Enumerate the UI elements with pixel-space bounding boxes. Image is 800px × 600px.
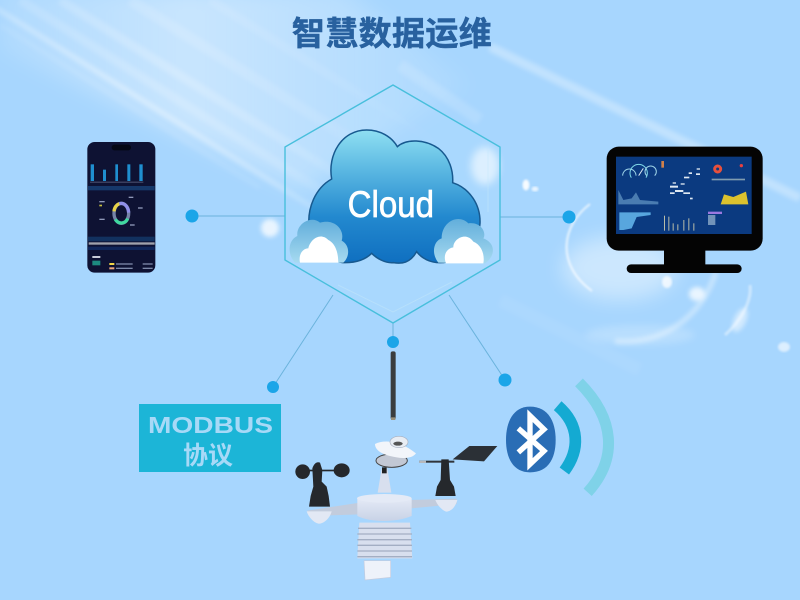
inner signal arc xyxy=(558,406,575,471)
dashboard side markers xyxy=(661,161,745,180)
bluetooth badge xyxy=(506,407,556,472)
sensor stem xyxy=(378,468,391,493)
phone app mockup xyxy=(87,142,155,273)
connector dots xyxy=(186,210,576,393)
dashboard scatter xyxy=(670,168,700,199)
connector lines xyxy=(192,216,569,387)
support arms xyxy=(307,499,457,515)
cloud label: Cloud xyxy=(348,183,434,225)
phone notch xyxy=(112,145,131,150)
left arm foot xyxy=(307,511,332,524)
small cloud right xyxy=(434,219,493,263)
MODBUS protocol badge xyxy=(139,404,281,472)
main cloud shape xyxy=(309,130,480,263)
hexagon frame xyxy=(285,85,500,323)
dashboard blue area chart xyxy=(619,212,651,230)
MODBUS label: MODBUS xyxy=(148,412,273,438)
shield fins xyxy=(357,528,412,557)
weather station xyxy=(295,351,497,580)
donut chart on phone xyxy=(114,203,129,223)
bluetooth rune xyxy=(518,416,544,464)
title: 智慧数据运维 xyxy=(292,15,492,52)
dashboard gauges xyxy=(623,164,656,178)
cloud icon xyxy=(290,130,493,263)
dashboard legend xyxy=(708,212,722,214)
dashboard left line chart xyxy=(618,190,658,204)
wind vane xyxy=(419,446,497,512)
antenna xyxy=(391,351,396,420)
Bluetooth symbol with signal arcs xyxy=(506,382,609,492)
monitor dashboard mockup xyxy=(607,147,763,273)
background with light streaks xyxy=(0,0,800,479)
bar chart on phone xyxy=(91,164,143,181)
dashboard bars xyxy=(664,216,694,231)
small cloud left xyxy=(290,220,348,263)
monitor body xyxy=(607,147,763,251)
anemometer xyxy=(295,462,350,507)
dashboard yellow area chart xyxy=(721,192,748,204)
outer signal arc xyxy=(579,382,609,492)
phone labels and bands xyxy=(88,182,155,269)
radiation shield xyxy=(357,523,412,558)
monitor stand xyxy=(627,248,742,273)
dashboard donut xyxy=(715,166,721,172)
monitor screen xyxy=(616,157,752,234)
protocol label: 协议 xyxy=(183,442,233,470)
mounting bracket xyxy=(364,561,391,580)
sensor dome xyxy=(375,436,416,467)
central hub xyxy=(357,494,412,521)
